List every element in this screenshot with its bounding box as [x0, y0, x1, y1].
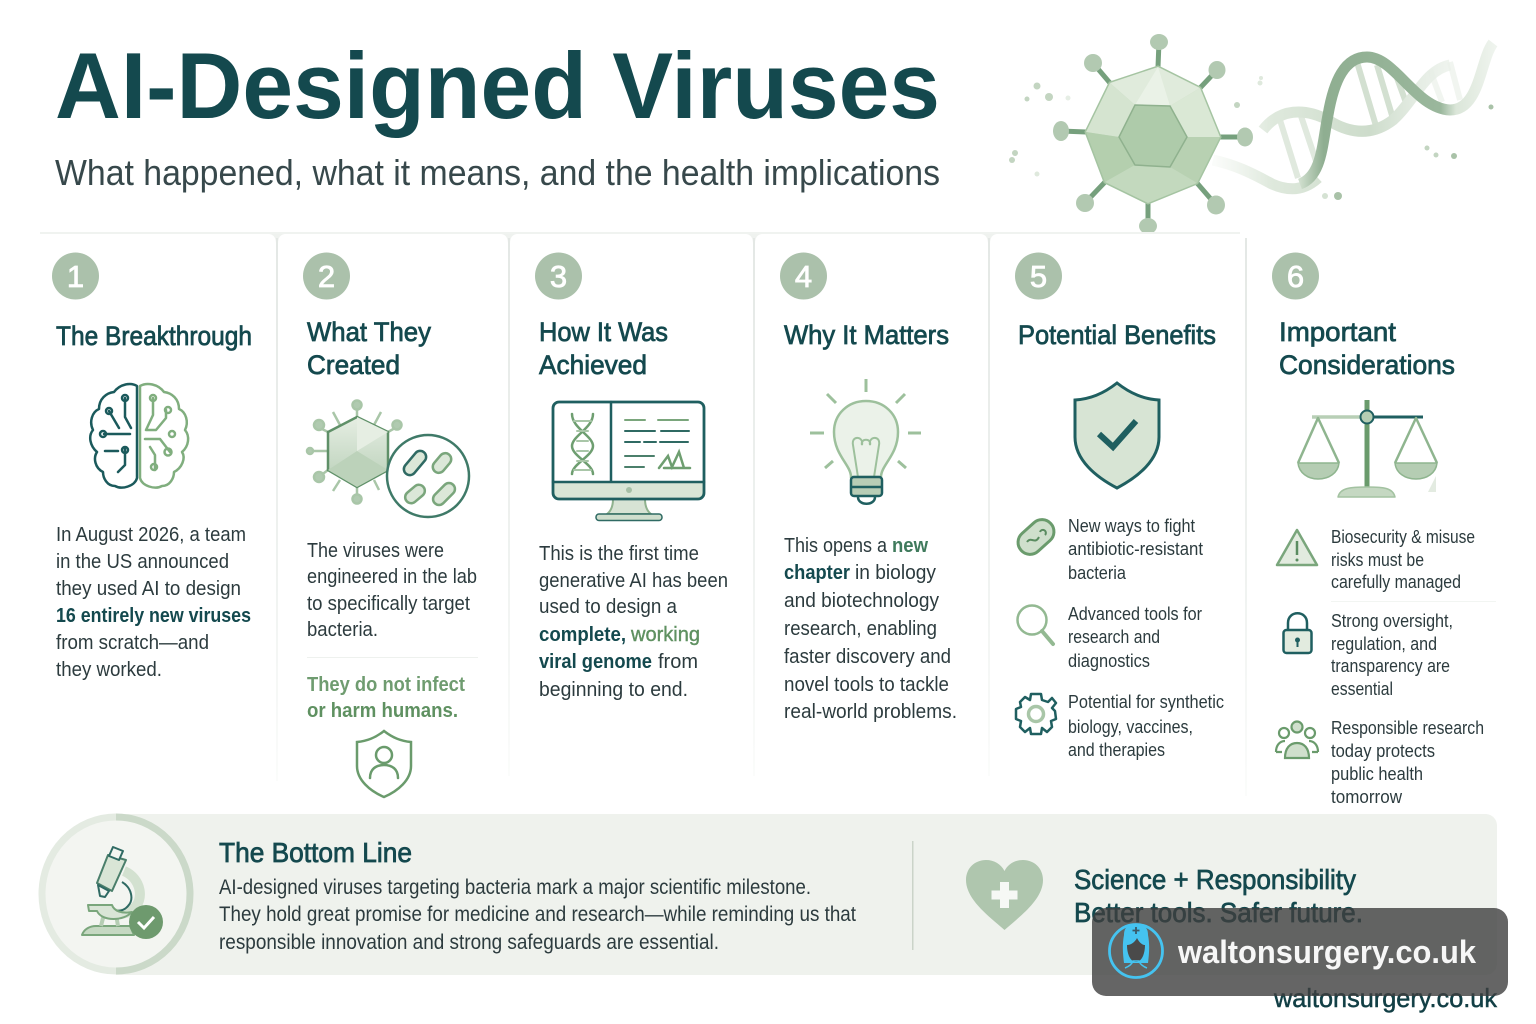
callout: no harm to humans [307, 674, 465, 722]
panel: the bottom line [42, 814, 1497, 975]
body text [784, 535, 957, 723]
body text: real-world problems. [784, 701, 957, 723]
consideration: biosecurity: Biosecurity & misuse [1331, 527, 1475, 547]
callout: no harm to humans: or harm humans. [307, 700, 458, 722]
body text: In August 2026, a team [56, 524, 246, 546]
icon: gear [1016, 694, 1056, 734]
body text: This opens a [784, 535, 888, 557]
body text: from scratch—and [56, 632, 209, 654]
benefit: research tools: diagnostics [1068, 651, 1150, 671]
body text: research, enabling [784, 618, 937, 640]
benefit: antibiotic-resistant bacteria: antibiotic-resistant [1068, 539, 1203, 559]
summary text [219, 876, 856, 954]
body text: in the US announced [56, 551, 229, 573]
number badge 1 [52, 252, 99, 300]
body text: complete, [539, 624, 626, 646]
callout: no harm to humans: They do not infect [307, 674, 465, 696]
heading [1279, 317, 1455, 380]
consideration: biosecurity [1277, 527, 1475, 592]
watermark badge: waltonsurgery.co.uk [1177, 934, 1476, 970]
benefit: synthetic biology: Potential for synthetic [1068, 692, 1224, 712]
number badge 2 [303, 252, 350, 300]
consideration: responsible research: today protects [1331, 741, 1435, 761]
number badge 5: 5 [1030, 259, 1047, 294]
tagline: Science + Responsibility [1074, 864, 1356, 895]
heading [539, 317, 668, 380]
icon: computer with DNA [553, 402, 704, 520]
body text: generative AI has been [539, 570, 728, 592]
heading: Considerations [1279, 350, 1455, 380]
icon: shield with check [1075, 383, 1159, 488]
icon: heart with cross [966, 860, 1043, 930]
heading: Potential Benefits [1018, 320, 1216, 350]
panel: why it matters [780, 252, 957, 723]
body text: This is the first time [539, 543, 699, 565]
icon: microscope in ring [42, 817, 190, 971]
consideration: oversight: Strong oversight, [1331, 611, 1453, 631]
consideration: biosecurity: risks must be [1331, 550, 1424, 570]
body text: working [630, 624, 700, 646]
heading: Achieved [539, 350, 647, 380]
icon: virus and bacteria [307, 400, 469, 517]
body text: novel tools to tackle [784, 674, 949, 696]
consideration: responsible research [1276, 718, 1484, 807]
consideration: oversight: essential [1331, 679, 1393, 699]
benefit: synthetic biology: biology, vaccines, [1068, 717, 1193, 737]
body text: and biotechnology [784, 590, 939, 612]
body text: they used AI to design [56, 578, 241, 600]
benefit: antibiotic-resistant bacteria: New ways to fight [1068, 516, 1195, 536]
consideration: oversight: regulation, and [1331, 634, 1437, 654]
number badge 2: 2 [318, 259, 335, 294]
number badge 6 [1272, 252, 1319, 300]
panel: important considerations [1272, 252, 1496, 807]
body text [539, 543, 728, 701]
benefit: antibiotic-resistant bacteria [1013, 515, 1203, 583]
heading: The Breakthrough [56, 321, 252, 351]
icon: bacterium [1013, 515, 1059, 559]
number badge 5 [1015, 252, 1062, 300]
body text [56, 524, 251, 681]
icon: magnifier [1018, 606, 1053, 644]
title: AI-Designed Viruses [55, 33, 940, 138]
body text: used to design a [539, 596, 678, 618]
body text: in biology [855, 562, 936, 584]
body text: new [892, 535, 928, 557]
icon: people group [1276, 722, 1318, 758]
heading: The Bottom Line [219, 837, 412, 868]
body text: bacteria. [307, 619, 378, 641]
number badge 1: 1 [67, 259, 84, 294]
body text: 16 entirely new viruses [56, 605, 251, 627]
benefit: antibiotic-resistant bacteria: bacteria [1068, 563, 1127, 583]
panel: what they created [303, 252, 478, 797]
body text: The viruses were [307, 540, 444, 562]
consideration: responsible research: Responsible research [1331, 718, 1484, 738]
heading: What They [307, 317, 431, 347]
heading: Why It Matters [784, 320, 949, 350]
summary text: They hold great promise for medicine and research—while reminding us that [219, 903, 856, 926]
icon: padlock [1284, 613, 1312, 653]
benefit: research tools: research and [1068, 627, 1160, 647]
benefit: research tools [1018, 604, 1202, 671]
footer url: waltonsurgery.co.uk [1273, 983, 1498, 1013]
body text [307, 540, 477, 641]
consideration: oversight: transparency are [1331, 656, 1450, 676]
number badge 4: 4 [795, 259, 812, 294]
number badge 3: 3 [550, 259, 567, 294]
body text: viral genome [539, 651, 652, 673]
consideration: responsible research: tomorrow [1331, 787, 1403, 807]
heading [307, 317, 431, 380]
icon: brain circuit [90, 384, 188, 488]
benefit: synthetic biology: and therapies [1068, 740, 1165, 760]
number badge 3 [535, 252, 582, 300]
summary text: responsible innovation and strong safeguards are essential. [219, 931, 719, 954]
icon: nurse avatar [1110, 924, 1162, 978]
heading: Created [307, 350, 400, 380]
body text: to specifically target [307, 593, 470, 615]
tagline: Better tools. Safer future. [1074, 897, 1363, 928]
consideration: biosecurity: carefully managed [1331, 572, 1461, 592]
icon: balance scales [1298, 400, 1437, 497]
number badge 6: 6 [1287, 259, 1304, 294]
body text: beginning to end. [539, 679, 688, 701]
benefit: synthetic biology [1016, 692, 1224, 760]
icon: light bulb [810, 379, 921, 504]
consideration: oversight [1284, 611, 1453, 699]
icon: warning triangle [1277, 530, 1317, 565]
body text: they worked. [56, 659, 162, 681]
summary text: AI-designed viruses targeting bacteria mark a major scientific milestone. [219, 876, 811, 899]
panel: card dividers [268, 234, 1247, 796]
illustration: virus particle [1053, 34, 1253, 234]
body text: engineered in the lab [307, 566, 477, 588]
subtitle: What happened, what it means, and the health implications [55, 152, 940, 193]
watermark badge [1092, 908, 1508, 996]
body text: faster discovery and [784, 646, 951, 668]
panel: potential benefits [1013, 252, 1224, 760]
top rule above cards [40, 232, 1240, 234]
benefit: research tools: Advanced tools for [1068, 604, 1202, 624]
number badge 4 [780, 252, 827, 300]
illustration: DNA helix [1213, 43, 1493, 189]
consideration: responsible research: public health [1331, 764, 1423, 784]
icon: shield with person [357, 731, 411, 797]
body text: chapter [784, 562, 850, 584]
panel: the breakthrough [52, 252, 252, 681]
tagline [1074, 864, 1363, 928]
heading: Important [1279, 317, 1396, 347]
heading: How It Was [539, 317, 668, 347]
illustration: floating particles [1009, 76, 1494, 200]
panel: how it was achieved [535, 252, 728, 701]
body text: from [658, 651, 698, 673]
